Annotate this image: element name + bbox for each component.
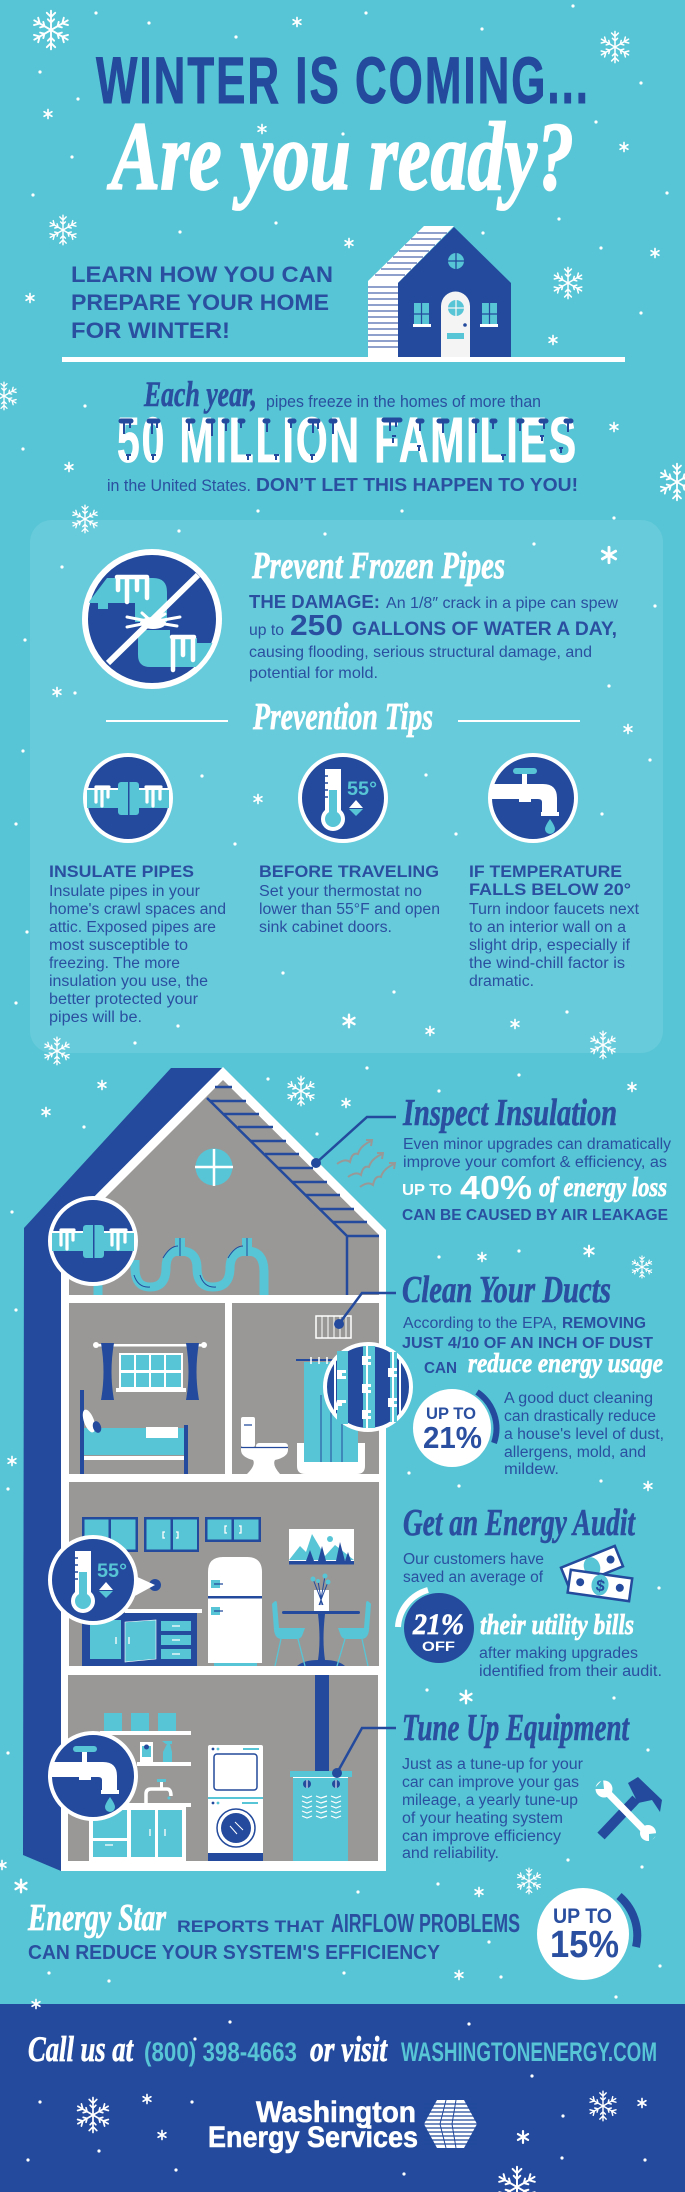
- damage text block: 250: [290, 610, 343, 642]
- section: tune up equipment: and reliability.: [402, 1845, 499, 1862]
- section: clean your ducts: JUST 4/10 OF AN INCH OF DUST: [402, 1335, 654, 1352]
- contact line: (800) 398-4663: [144, 2037, 297, 2067]
- intro heading: PREPARE YOUR HOME: [71, 290, 329, 315]
- section: clean your ducts: According to the EPA,: [403, 1315, 557, 1332]
- tip: insulate pipes: insulation you use, the: [49, 973, 208, 990]
- damage text block: up to: [249, 622, 284, 639]
- airflow statement: AIRFLOW PROBLEMS: [331, 1908, 520, 1938]
- intro heading: LEARN HOW YOU CAN: [71, 262, 333, 287]
- stat badge: 21% off: OFF: [422, 1638, 456, 1654]
- damage text block: potential for mold.: [249, 665, 378, 682]
- contact line: [28, 2029, 657, 2069]
- section: tune up equipment: [402, 1707, 662, 1862]
- house side wall: [23, 1068, 223, 1871]
- section: tune up equipment: of your heating system: [402, 1810, 563, 1827]
- section: clean your ducts: Clean Your Ducts: [402, 1269, 611, 1311]
- tip: insulate pipes: freezing. The more: [49, 955, 180, 972]
- section: clean your ducts: mildew.: [504, 1461, 559, 1478]
- stat badge: up to 15%: UP TO: [553, 1905, 612, 1928]
- icon: dripping faucet: [490, 755, 576, 841]
- icon: thermostat 55: [300, 755, 386, 841]
- section: clean your ducts: a house's level of dust,: [504, 1426, 664, 1443]
- icon: money: [561, 1546, 632, 1601]
- house illustration: [23, 1067, 411, 1871]
- icon: insulated pipe: [85, 755, 171, 841]
- tip: if temperature falls: IF TEMPERATURE: [469, 862, 622, 881]
- section: inspect insulation: improve your comfort & efficiency, as: [403, 1154, 667, 1171]
- icon: air leak arrows: [337, 1140, 395, 1187]
- tip: insulate pipes: home's crawl spaces and: [49, 901, 226, 918]
- magnifier: faucet: [50, 1733, 136, 1819]
- callout line: insulation: [311, 1117, 396, 1168]
- icon: money: $: [595, 1578, 606, 1596]
- stat badge: up to 21%: 21%: [423, 1420, 482, 1455]
- icon: house: [368, 226, 511, 357]
- tip: insulate pipes: most susceptible to: [49, 937, 188, 954]
- airflow statement: [27, 1897, 520, 1964]
- section: clean your ducts: can drastically reduce: [504, 1408, 656, 1425]
- section: inspect insulation: 40%: [460, 1169, 532, 1206]
- tip: insulate pipes: pipes will be.: [49, 1009, 142, 1026]
- section: clean your ducts: allergens, mold, and: [504, 1444, 646, 1461]
- tip: insulate pipes: better protected your: [49, 991, 198, 1008]
- info panel background: [30, 520, 663, 1053]
- statistic: 50 million families: [107, 374, 578, 495]
- callout line: ducts: [334, 1293, 396, 1329]
- section: get an energy audit: Our customers have: [403, 1551, 544, 1568]
- damage text block: THE DAMAGE:: [249, 592, 380, 612]
- ground line: [62, 357, 625, 362]
- magnifier: frozen attic pipe: [50, 1198, 136, 1284]
- section: get an energy audit: after making upgrades: [479, 1645, 638, 1662]
- intro heading: FOR WINTER!: [71, 318, 230, 343]
- statistic: 50 million families: Each year,: [143, 374, 257, 414]
- bedroom: [69, 1303, 225, 1474]
- icicle drips on headline: [124, 421, 568, 460]
- tip: insulate pipes: Insulate pipes in your: [49, 883, 200, 900]
- section: inspect insulation: Inspect Insulation: [402, 1092, 617, 1134]
- logo: Washington Energy Services: [208, 2096, 477, 2154]
- kitchen: [69, 1482, 379, 1666]
- airflow statement: REPORTS THAT: [177, 1917, 325, 1936]
- damage text block: [249, 592, 618, 682]
- section: clean your ducts: [402, 1269, 664, 1478]
- contact line: or visit: [310, 2029, 388, 2069]
- stat badge: up to 15%: [537, 1888, 637, 1980]
- tip: if temperature falls: [469, 862, 640, 990]
- section: tune up equipment: car can improve your gas: [402, 1774, 579, 1791]
- section: inspect insulation: Even minor upgrades can dramatically: [403, 1136, 671, 1153]
- damage text block: An 1/8″ crack in a pipe can spew: [386, 595, 618, 612]
- tip: if temperature falls: the wind-chill factor is: [469, 955, 625, 972]
- icicle caps on headline: [121, 420, 571, 421]
- statistic: 50 million families: in the United States.: [107, 476, 251, 495]
- section: clean your ducts: CAN: [424, 1360, 457, 1377]
- section: inspect insulation: [402, 1092, 671, 1224]
- section: inspect insulation: UP TO: [402, 1182, 452, 1199]
- intro heading: [71, 262, 333, 343]
- callout line: equipment: [332, 1728, 396, 1778]
- heading: prevention tips: Prevention Tips: [252, 696, 433, 738]
- section: tune up equipment: Just as a tune-up for your: [402, 1756, 583, 1773]
- section: inspect insulation: CAN BE CAUSED BY AIR LEAKAGE: [402, 1207, 668, 1224]
- tip: before traveling: Set your thermostat no: [259, 883, 422, 900]
- section: get an energy audit: [398, 1502, 662, 1680]
- stat badge: 21% off: [398, 1590, 474, 1663]
- house floors: [69, 1295, 379, 1675]
- section: clean your ducts: A good duct cleaning: [504, 1390, 653, 1407]
- contact line: Call us at: [28, 2029, 134, 2069]
- tip: insulate pipes: attic. Exposed pipes are: [49, 919, 216, 936]
- panel heading: prevent frozen pipes: Prevent Frozen Pipes: [251, 545, 505, 587]
- section: get an energy audit: their utility bills: [480, 1609, 634, 1641]
- section: tune up equipment: can improve efficiency: [402, 1828, 561, 1845]
- basement: [68, 1675, 378, 1861]
- tip: if temperature falls: slight drip, especially if: [469, 937, 631, 954]
- damage text block: GALLONS OF WATER A DAY,: [352, 619, 617, 640]
- tip: insulate pipes: [49, 862, 226, 1026]
- house outline: [61, 1067, 386, 1871]
- tip: insulate pipes: INSULATE PIPES: [49, 862, 194, 881]
- stat badge: 21% off: 21%: [412, 1608, 464, 1641]
- statistic: 50 million families: DON’T LET THIS HAPPEN TO YOU!: [256, 475, 578, 495]
- tip: before traveling: [259, 862, 440, 936]
- bathroom: [232, 1303, 379, 1474]
- tip: if temperature falls: to an interior wall on a: [469, 919, 626, 936]
- airflow statement: Energy Star: [27, 1897, 167, 1939]
- logo: Washington Energy Services: Washington: [256, 2096, 416, 2129]
- stat badge: up to 15%: 15%: [550, 1924, 619, 1966]
- tip: if temperature falls: Turn indoor faucets next: [469, 901, 640, 918]
- icon: hammer and wrench: [594, 1777, 662, 1844]
- stat badge: up to 21%: UP TO: [426, 1404, 476, 1423]
- footer band: [0, 2004, 685, 2192]
- section: tune up equipment: mileage, a yearly tune-up: [402, 1792, 578, 1809]
- damage text block: causing flooding, serious structural damage, and: [249, 644, 592, 661]
- tip: if temperature falls: dramatic.: [469, 973, 534, 990]
- section: clean your ducts: REMOVING: [562, 1315, 646, 1332]
- section: get an energy audit: identified from their audit.: [479, 1663, 662, 1680]
- tip: before traveling: sink cabinet doors.: [259, 919, 392, 936]
- magnifier: dusty duct: [325, 1344, 411, 1430]
- icon: no frozen pipes: [85, 552, 219, 686]
- title: [96, 43, 590, 211]
- tip: before traveling: BEFORE TRAVELING: [259, 862, 439, 881]
- tip: before traveling: lower than 55°F and open: [259, 901, 440, 918]
- attic room: [69, 1080, 379, 1295]
- airflow statement: CAN REDUCE YOUR SYSTEM'S EFFICIENCY: [28, 1942, 441, 1964]
- logo: Washington Energy Services: Energy Services: [208, 2121, 418, 2154]
- stat badge: up to 21%: [413, 1389, 496, 1467]
- tip: if temperature falls: FALLS BELOW 20°: [469, 880, 631, 899]
- magnifier: thermostat: [50, 1537, 136, 1623]
- section: get an energy audit: saved an average of: [403, 1569, 544, 1586]
- statistic: 50 million families: pipes freeze in the homes of more than: [266, 392, 541, 411]
